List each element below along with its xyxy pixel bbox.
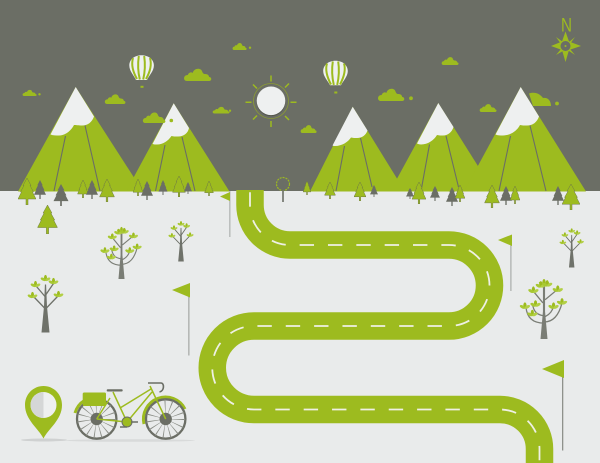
pannier bag xyxy=(83,392,106,406)
compass xyxy=(551,16,581,62)
sun xyxy=(246,76,296,127)
leafy tree 4 xyxy=(559,228,584,268)
flag 1 xyxy=(220,191,230,237)
bike frame xyxy=(97,386,166,422)
rear wheel xyxy=(75,397,116,439)
saddle xyxy=(107,389,123,392)
cloud behind mountain 5 xyxy=(529,93,559,106)
mountains xyxy=(18,87,586,192)
crank xyxy=(120,417,138,427)
clouds xyxy=(23,43,497,133)
sky xyxy=(0,0,600,192)
pin shadow xyxy=(21,438,67,442)
ground xyxy=(0,191,600,463)
bike shadow xyxy=(65,439,195,442)
hot air balloon left xyxy=(129,55,154,88)
leafy tree 3 xyxy=(27,275,64,332)
lone conifer xyxy=(38,205,58,234)
outline tree on horizon xyxy=(276,178,290,202)
conifer trees along the horizon xyxy=(18,176,580,210)
mountain 3 xyxy=(310,107,405,192)
mountain 4 xyxy=(390,103,494,192)
winding road xyxy=(212,190,540,463)
bicycle xyxy=(65,383,195,442)
mountain 1 xyxy=(18,87,143,192)
mountain 5 xyxy=(464,87,586,192)
leafy tree 5 xyxy=(519,279,568,339)
leafy tree 2 xyxy=(168,221,194,262)
front wheel xyxy=(143,397,185,439)
flag 3 xyxy=(498,234,512,291)
compass letter N: N xyxy=(561,16,572,36)
mountain 2 xyxy=(126,103,230,192)
hot air balloon right xyxy=(323,61,348,94)
road centre dashes xyxy=(212,190,540,463)
handlebar xyxy=(148,383,163,392)
flag 2 xyxy=(172,283,190,356)
compass star xyxy=(551,32,581,62)
leafy tree 1 xyxy=(100,227,142,279)
flag 4 xyxy=(542,360,564,450)
location pin xyxy=(21,386,67,442)
